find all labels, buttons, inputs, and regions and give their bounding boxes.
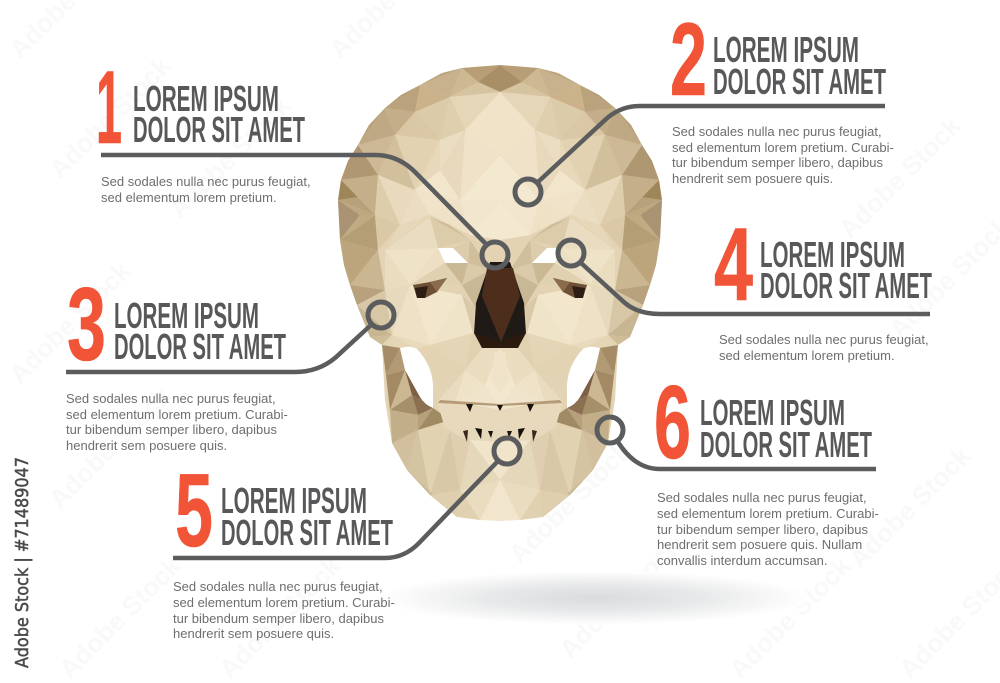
heading 1: LOREM IPSUM: [133, 78, 279, 119]
body text 3: sed elementum lorem pretium. Curabi-: [66, 407, 288, 422]
heading 3: LOREM IPSUM: [114, 295, 259, 336]
marker 6: [597, 417, 623, 443]
leader line 5: [173, 461, 498, 558]
text: Adobe Stock: [43, 380, 177, 514]
body text 6: sed elementum lorem pretium. Curabi-: [657, 506, 879, 521]
callout 1: [96, 50, 508, 268]
text: Adobe Stock: [843, 440, 977, 574]
body text 5: Sed sodales nulla nec purus feugiat,: [173, 579, 383, 594]
callout 1: 1: [96, 50, 122, 166]
body text 4: sed elementum lorem pretium.: [719, 348, 895, 363]
body text 5: sed elementum lorem pretium. Curabi-: [173, 595, 395, 610]
callout 4: [558, 207, 932, 363]
text: Adobe Stock: [3, 255, 137, 389]
body text 6: tur bibendum semper libero, dapibus: [657, 522, 869, 537]
body text 6: convallis interdum accumsan.: [657, 553, 828, 568]
text: Adobe Stock: [503, 435, 637, 569]
leader line 3: [66, 325, 371, 372]
text: Adobe Stock: [53, 550, 187, 683]
text: Adobe Stock: [43, 50, 177, 184]
body text 2: Sed sodales nulla nec purus feugiat,: [672, 124, 882, 139]
marker 3: [368, 302, 394, 328]
leader line 4: [581, 263, 930, 314]
heading 1: DOLOR SIT AMET: [133, 109, 305, 150]
text: Adobe Stock: [163, 90, 297, 224]
text: Adobe Stock: [723, 550, 857, 683]
body text 5: hendrerit sem posuere quis.: [173, 626, 334, 641]
callout 6: [597, 365, 879, 568]
text: Adobe Stock: [213, 550, 347, 683]
marker 5: [494, 438, 520, 464]
text: Adobe Stock: [553, 530, 687, 664]
marker 1: [482, 242, 508, 268]
polygonal skull illustration: [338, 65, 662, 521]
leader line 2: [538, 106, 885, 182]
body text 4: Sed sodales nulla nec purus feugiat,: [719, 332, 929, 347]
body text 2: tur bibendum semper libero, dapibus: [672, 155, 884, 170]
body text 2: hendrerit sem posuere quis.: [672, 171, 833, 186]
ground shadow: [380, 571, 810, 625]
body text 3: Sed sodales nulla nec purus feugiat,: [66, 391, 276, 406]
marker 4: [558, 240, 584, 266]
stock image id label: Adobe Stock | #71489047: [13, 457, 33, 668]
body text 2: sed elementum lorem pretium. Curabi-: [672, 140, 894, 155]
heading 6: LOREM IPSUM: [700, 392, 845, 433]
callout 3: [66, 267, 394, 453]
number 2: 2: [670, 2, 707, 118]
heading 5: DOLOR SIT AMET: [221, 512, 393, 553]
leader line 6: [618, 442, 876, 469]
heading 6: DOLOR SIT AMET: [700, 424, 872, 465]
body text 1: Sed sodales nulla nec purus feugiat,: [101, 174, 311, 189]
leader line 1: [101, 155, 486, 244]
number 5: 5: [175, 453, 213, 569]
body text 5: tur bibendum semper libero, dapibus: [173, 611, 385, 626]
number 4: 4: [714, 207, 753, 323]
callout 5: [173, 438, 520, 641]
body text 3: hendrerit sem posuere quis.: [66, 438, 227, 453]
heading 2: LOREM IPSUM: [713, 29, 859, 70]
body text 6: Sed sodales nulla nec purus feugiat,: [657, 490, 867, 505]
marker 2: [515, 179, 541, 205]
body text 6: hendrerit sem posuere quis. Nullam: [657, 537, 862, 552]
heading 3: DOLOR SIT AMET: [114, 326, 286, 367]
text: Adobe Stock: [833, 110, 967, 244]
heading 5: LOREM IPSUM: [221, 480, 367, 521]
number 3: 3: [67, 267, 106, 383]
body text 1: sed elementum lorem pretium.: [101, 190, 277, 205]
body text 3: tur bibendum semper libero, dapibus: [66, 422, 278, 437]
callout 2: [515, 2, 894, 205]
number 6: 6: [654, 365, 691, 481]
